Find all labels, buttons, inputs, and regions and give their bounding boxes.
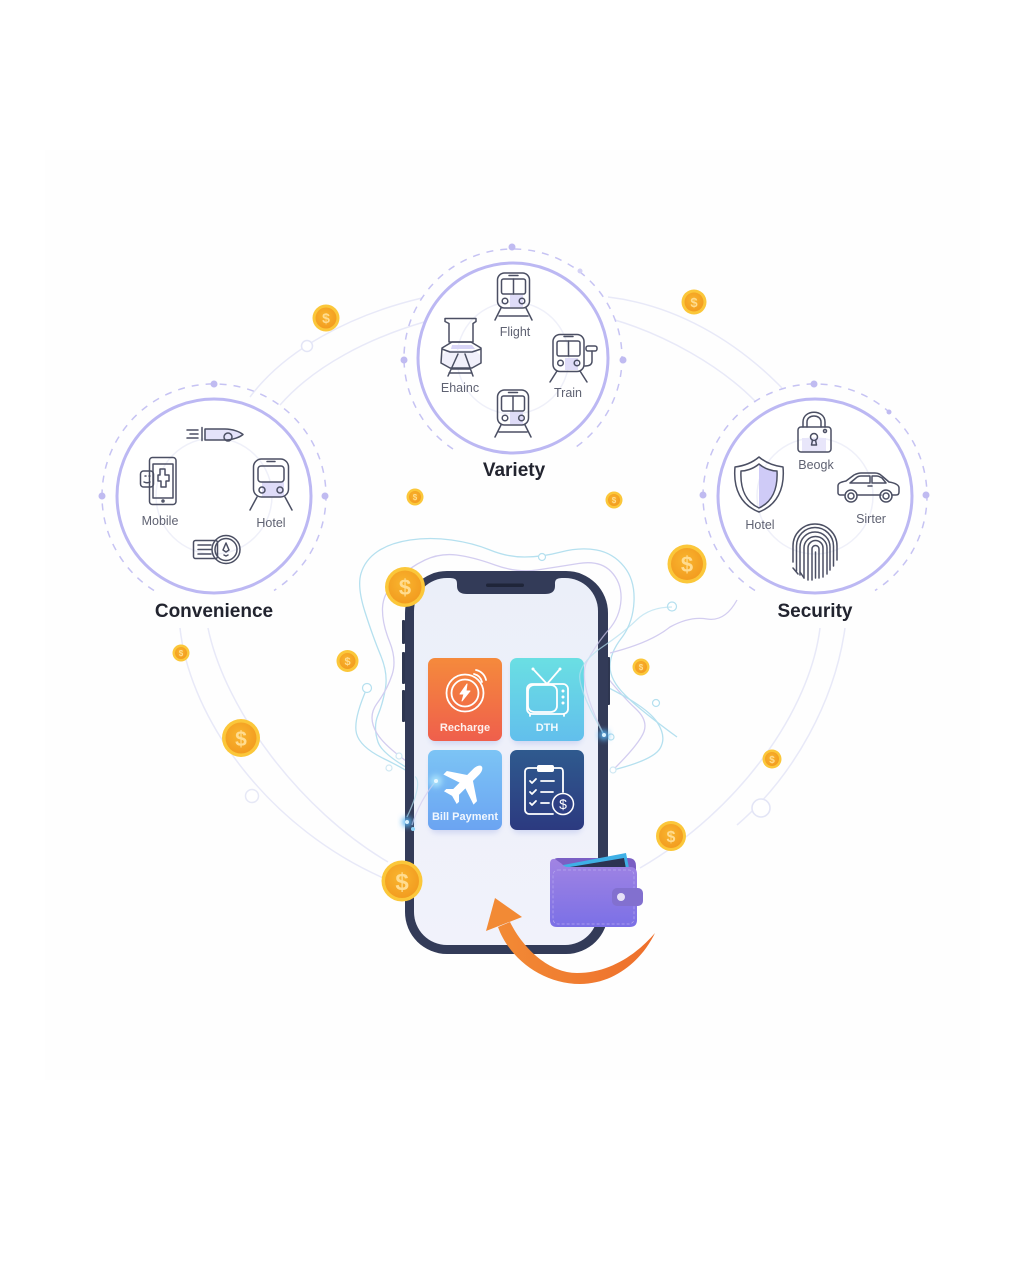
panel: variety [400,244,626,453]
coin [382,860,422,902]
coin: $ [395,869,409,896]
coin: $ [344,656,351,668]
tile: DTH [510,658,584,741]
phone notch [449,578,563,594]
coin [632,658,650,676]
coin [336,650,358,672]
coin: $ [769,755,775,766]
panel: convenience [98,380,328,593]
label: mobile: Mobile [142,514,178,528]
phone screen [414,578,598,945]
tile shadows [430,662,582,833]
heading: security: Security [778,601,853,622]
connector arcs [180,297,845,880]
tile: bill checklist: $ [559,796,567,812]
wallet cards [558,853,629,869]
wallet clasp [612,888,643,906]
icon: seat [441,318,481,376]
label: train: Train [554,386,582,400]
coin [668,544,706,584]
phone side buttons [402,620,610,722]
label: recharge: Recharge [440,722,490,734]
coin: $ [667,829,676,846]
panel: security [700,380,930,593]
label: hotel: Hotel [256,516,286,530]
coin: $ [413,493,418,502]
label: bill payment: Bill Payment [432,811,498,823]
coin [682,290,706,314]
heading: convenience: Convenience [155,601,273,622]
phone body [405,571,608,954]
label: beogk: Beogk [798,458,834,472]
icon: padlock [798,412,831,452]
coin [762,750,782,768]
coin: $ [639,663,644,672]
wavy network lines [356,538,737,780]
label: sirter: Sirter [856,512,886,526]
label: flight: Flight [500,325,531,339]
icon: train [250,459,292,510]
coin [385,567,425,607]
heading: variety: Variety [483,460,546,481]
coin: $ [322,310,330,326]
coin: $ [681,552,693,577]
phone [402,571,672,954]
coin: $ [690,295,698,310]
orange arrow [486,898,655,984]
label: hotel: Hotel [745,518,775,532]
icon: ticket and coin [194,536,240,564]
label: DTH: DTH [536,722,558,734]
icon: airplane [435,751,497,813]
coin: $ [399,575,411,600]
glowing nodes [402,730,609,831]
icon: shield [735,457,783,512]
coin [656,821,686,851]
coin: $ [235,728,247,751]
coin: $ [179,649,184,658]
tile: recharge [428,658,502,741]
lines crossing the phone [407,607,672,825]
coin: $ [612,496,617,505]
tile: bill payment [428,750,502,830]
icon: train right [550,334,597,382]
tile: bill checklist [510,750,584,830]
background panel [45,150,980,1080]
icon: train bottom [495,390,531,437]
coin [606,492,622,508]
icon: fingerprint [793,524,837,580]
icon: train top [495,273,532,320]
coin [312,304,340,332]
icon: bullet train [187,428,243,441]
coin [172,644,190,662]
icon: mobile [140,458,176,504]
wallet [550,853,643,927]
coin [222,719,260,757]
label: ehainc: Ehainc [441,381,479,395]
icon: car [838,473,899,502]
coin [406,488,424,506]
